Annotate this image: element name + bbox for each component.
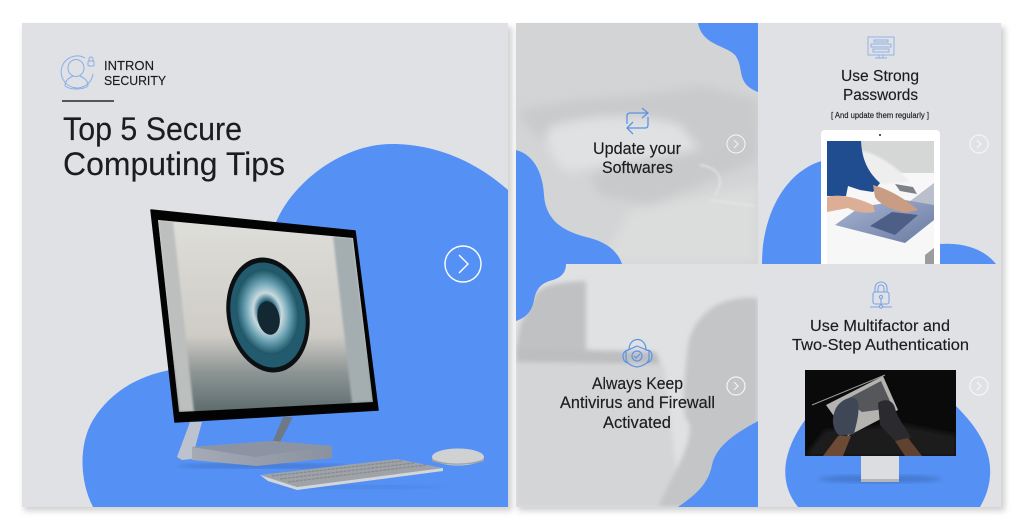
blue corner blobs [698,23,758,92]
title: Computing Tips [63,146,285,182]
logo text: SECURITY [104,74,167,88]
icon: refresh arrows [627,108,648,134]
keyboard [260,459,443,487]
panel: use strong passwords [758,23,1001,270]
icon: user with lock [61,56,94,89]
text: Update your [593,140,681,158]
text: Antivirus and Firewall [560,394,715,412]
camera lens [226,258,310,372]
text [594,142,681,174]
panel: antivirus and firewall [516,264,758,507]
text: Always Keep [592,375,683,393]
mouse [432,448,484,466]
photo: gloved hands on laptop [805,370,956,456]
icon: next arrow [970,377,988,395]
monitor [805,370,956,483]
icon: cloud shield [623,340,652,367]
text [560,375,715,432]
blue blob background [82,144,508,507]
subtitle: [ And update them regularly ] [831,111,929,120]
title: Top 5 Secure [63,111,242,147]
photo: hands on keyboard [528,90,755,254]
text: Passwords [843,87,918,104]
text: Softwares [602,159,673,177]
blue blobs [762,160,996,264]
photo: person at computer [516,281,758,507]
stand [861,456,899,482]
monitor frame [151,210,378,422]
blue blob [785,406,990,507]
tablet [821,130,940,270]
logo text [104,60,166,86]
stand arms [177,422,202,460]
panel: update your softwares [516,23,758,264]
text [792,318,969,354]
base [192,441,332,466]
icon: next arrow [970,135,988,153]
text: Use Strong [841,68,919,85]
icon: next arrow [727,377,745,395]
illustration: all-in-one computer [150,210,484,490]
panel: cover [22,23,508,507]
photo highlights [700,164,721,189]
logo text: INTRON [104,59,154,73]
logo: Intron Security [61,56,167,89]
icon: next arrow [727,135,745,153]
icon: next arrow [445,246,481,282]
photo: typing on laptop [827,141,934,264]
monitor screen [150,218,380,414]
shadow [818,475,942,483]
icon: password monitor [868,37,894,58]
text: Use Multifactor and [810,318,950,335]
text [842,70,918,100]
title [63,111,285,182]
desk shadow [177,464,347,468]
blue corner blobs [516,264,566,321]
text: Activated [603,414,671,432]
text: Two-Step Authentication [792,337,969,354]
panel: multifactor authentication [758,264,1001,507]
icon: network lock [870,282,892,308]
